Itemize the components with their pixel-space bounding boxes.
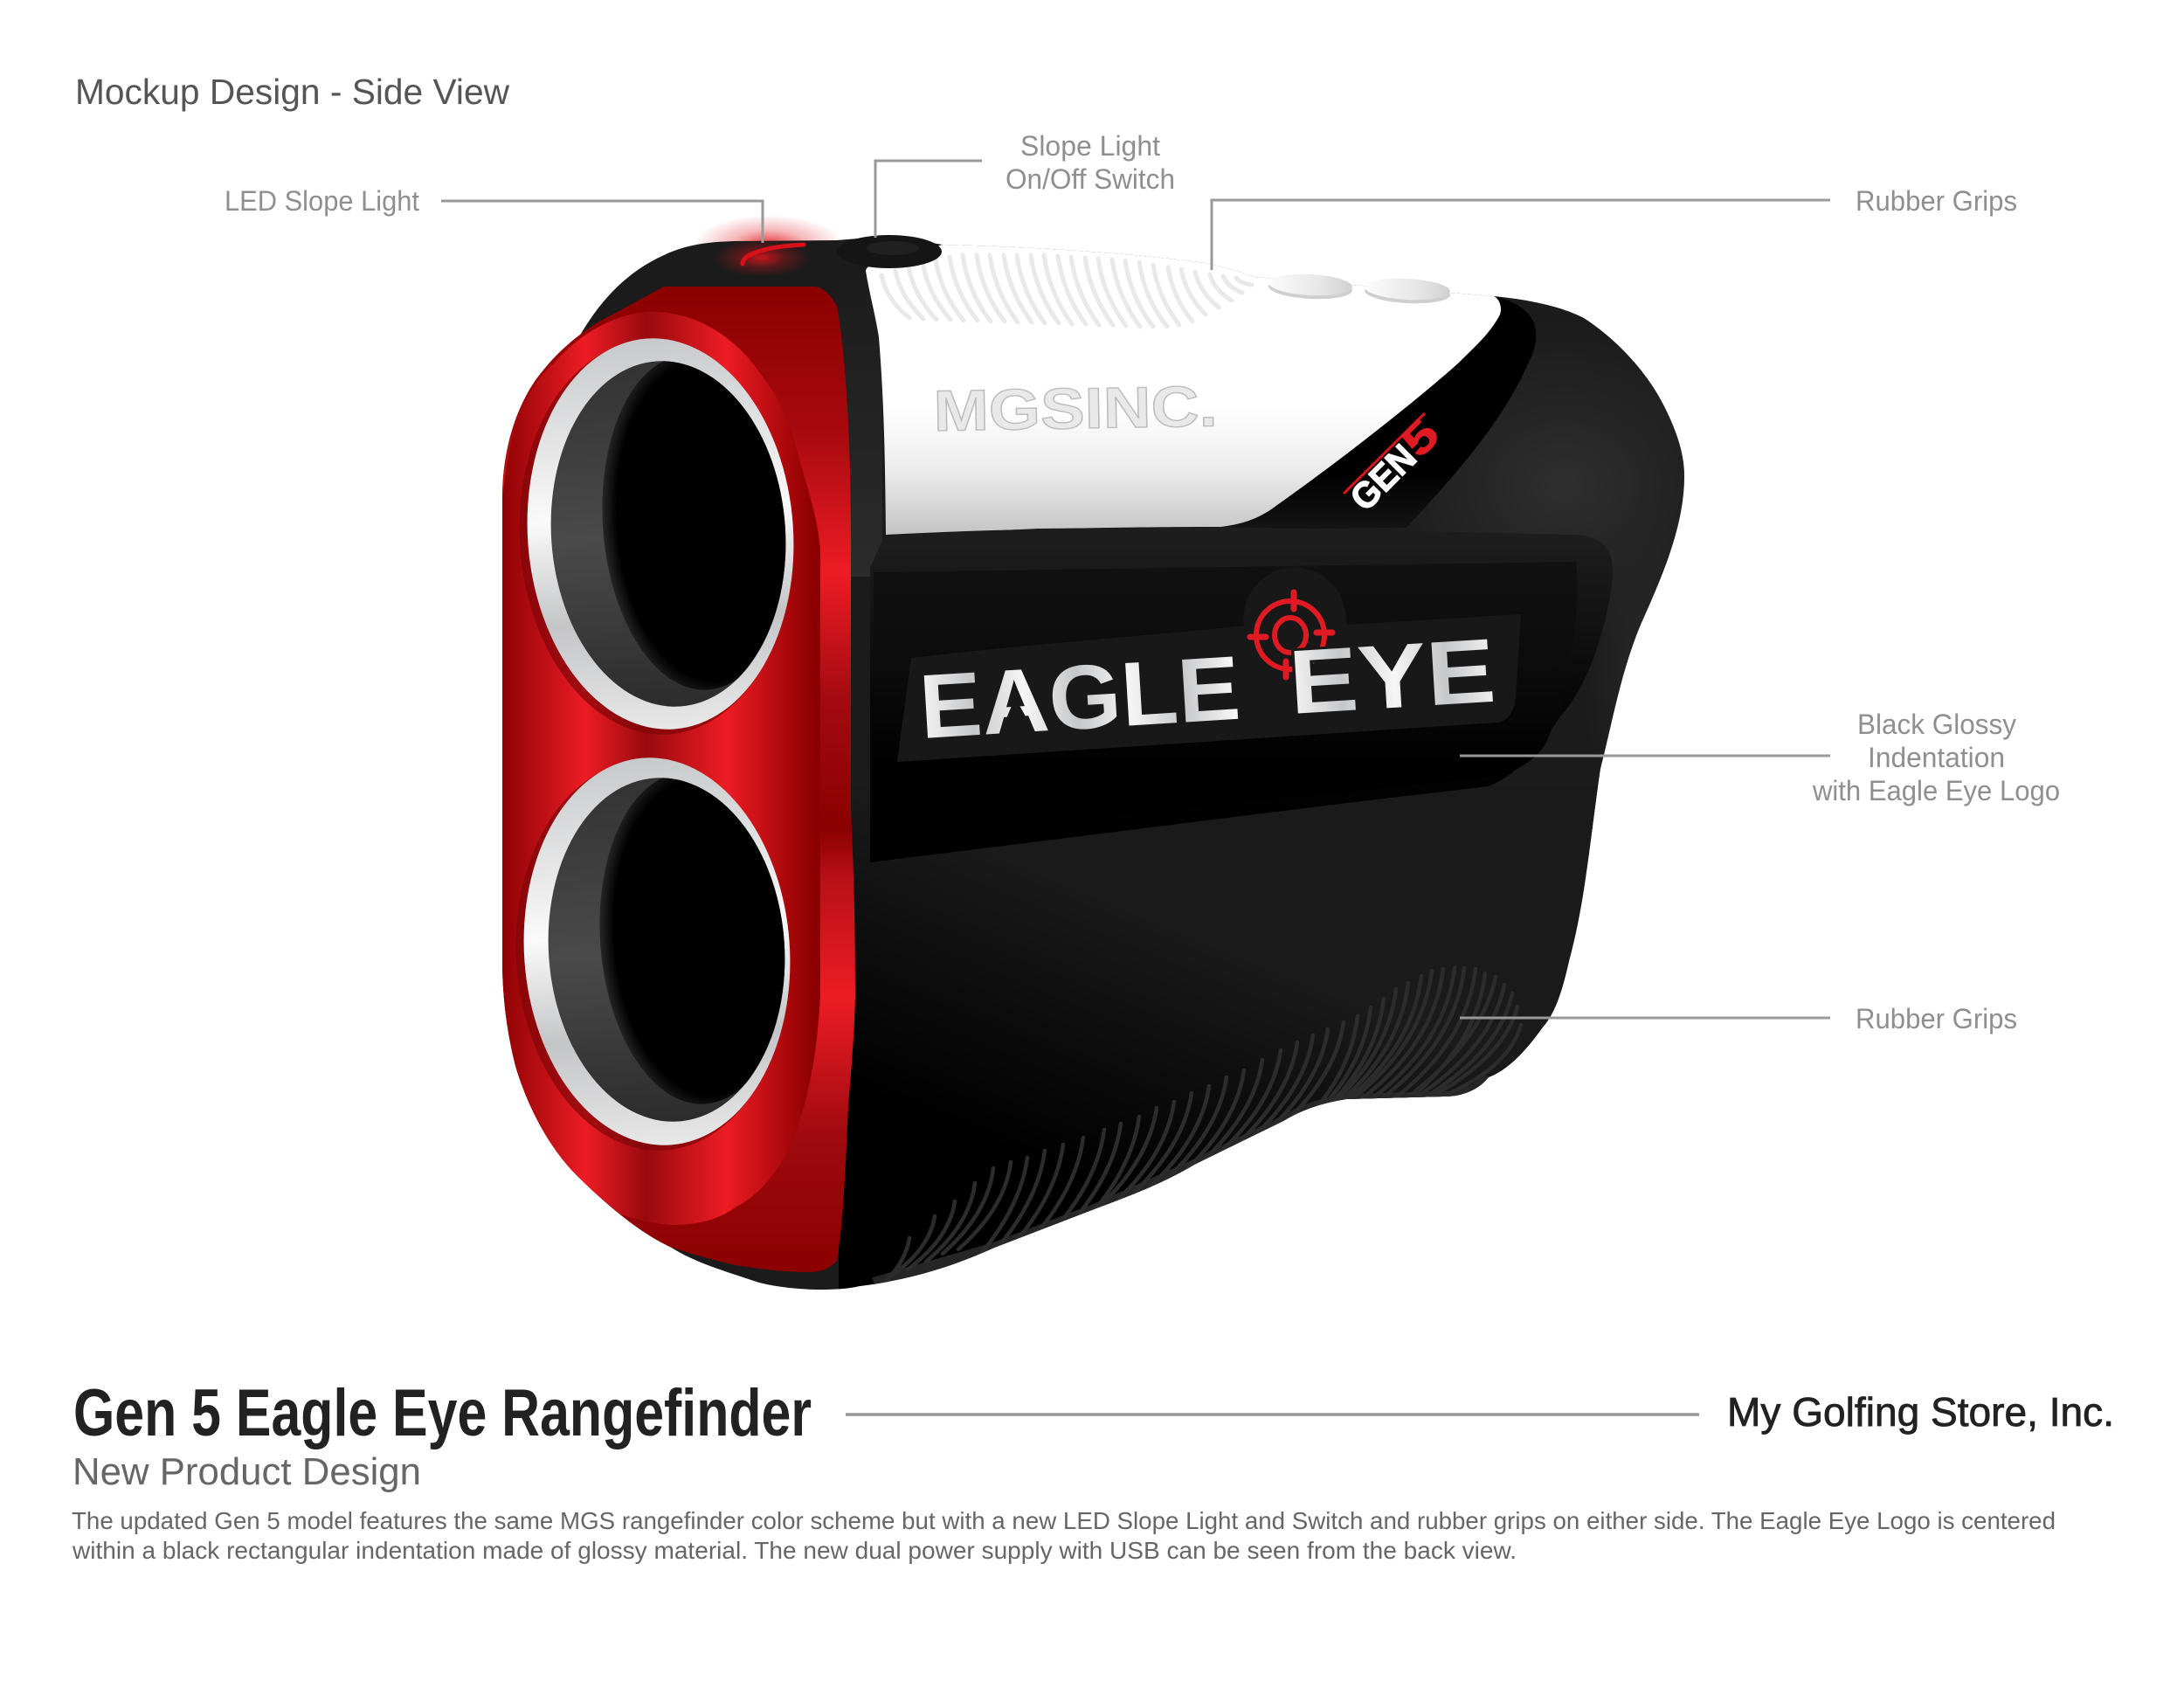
upper lens <box>519 338 793 735</box>
black Gen 5 strip <box>1206 296 1536 529</box>
rangefinder product illustration <box>489 215 1765 1311</box>
lower lens <box>515 758 790 1151</box>
callout: top rubber grips: Rubber Grips <box>1856 185 2017 217</box>
Eagle Eye logo with red target reticle <box>916 592 1498 758</box>
LED slope light <box>714 239 810 277</box>
callout: black glossy indentation: Black Glossy <box>1857 709 2016 740</box>
Eagle Eye logo plate <box>897 567 1521 762</box>
callout: black glossy indentation: Indentation <box>1868 742 2005 773</box>
company name: My Golfing Store, Inc. <box>1727 1389 2114 1435</box>
MGS Inc embossed logo: MGSINC. <box>933 373 1218 443</box>
glossy indentation <box>870 527 1613 862</box>
callout: slope light on/off switch: Slope Light <box>1020 130 1160 162</box>
LED glow above body <box>695 215 843 274</box>
red front face rim <box>502 312 820 1225</box>
callout: slope light on/off switch: On/Off Switch <box>1006 163 1175 195</box>
slope light switch <box>837 235 942 268</box>
subtitle: New Product Design <box>73 1450 421 1493</box>
body silhouette <box>502 239 1684 1290</box>
callout: LED slope light: LED Slope Light <box>225 185 419 217</box>
description text: The updated Gen 5 model features the same MGS rangefinder color scheme but with a new LED Slope Light and Switch and rubber grips on either side. The Eagle Eye Logo is centered <box>72 1507 2056 1534</box>
Gen 5 badge: 5 <box>1392 410 1448 467</box>
Gen 5 badge <box>1342 410 1448 518</box>
top buttons <box>1268 273 1451 306</box>
bottom rubber grip ribs <box>864 968 1521 1299</box>
description text: within a black rectangular indentation made of glossy material. The new dual power supply with USB can be seen from the back view. <box>72 1537 1517 1564</box>
Eagle Eye logo with red target reticle: EYE <box>1286 620 1498 734</box>
description text <box>72 1507 2056 1564</box>
callout: black glossy indentation: with Eagle Eye Logo <box>1812 775 2060 806</box>
Eagle Eye logo with red target reticle: EAGLE <box>916 638 1243 758</box>
callout: top rubber grips <box>1212 185 2017 270</box>
top rubber grip ribs <box>881 255 1252 327</box>
red front housing <box>502 287 855 1272</box>
callout: black glossy indentation <box>1460 709 2060 806</box>
white top panel <box>866 245 1501 535</box>
Gen 5 badge: GEN <box>1342 436 1424 518</box>
callout: lower rubber grips: Rubber Grips <box>1856 1003 2017 1034</box>
callout: slope light on/off switch <box>875 130 1175 238</box>
heading: mockup design side view: Mockup Design - Side View <box>75 72 509 112</box>
title: Gen 5 Eagle Eye Rangefinder <box>73 1376 812 1450</box>
A crossbar cut-out <box>999 696 1033 731</box>
icon: red target reticle <box>1250 592 1332 677</box>
callout: LED slope light <box>225 185 763 243</box>
divider line between title and company <box>846 1413 1699 1416</box>
